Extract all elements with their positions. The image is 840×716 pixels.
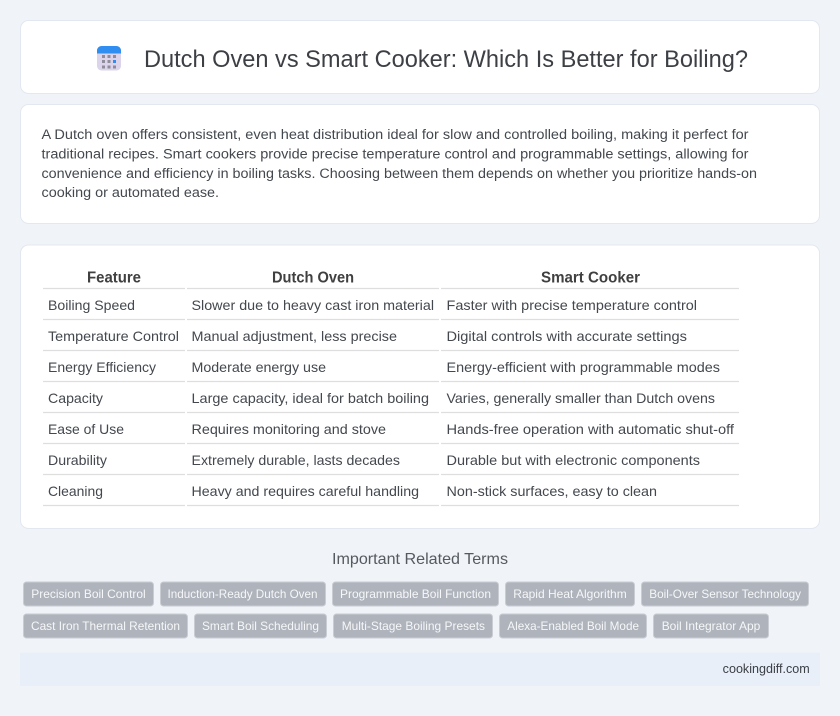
footer xyxy=(20,652,820,686)
tag: Boil Integrator App xyxy=(662,619,761,633)
table row: energy efficiency: Energy-efficient with programmable modes xyxy=(446,359,720,375)
tag xyxy=(506,582,634,606)
text block: introduction paragraph: convenience and efficiency in boiling tasks. Choosing between them depends on whether you prioritize hands-on xyxy=(42,166,757,182)
table row: capacity: Varies, generally smaller than Dutch ovens xyxy=(446,390,715,406)
tags: related terms xyxy=(24,582,808,638)
tag: Precision Boil Control xyxy=(31,587,146,601)
table header row xyxy=(43,270,739,288)
table row: temperature control: Digital controls with accurate settings xyxy=(446,328,687,344)
tag: Rapid Heat Algorithm xyxy=(513,587,627,601)
header panel xyxy=(20,20,820,94)
table row: cleaning: Heavy and requires careful handling xyxy=(192,483,419,499)
tag: Cast Iron Thermal Retention xyxy=(31,619,180,633)
table header row: Feature xyxy=(87,270,141,286)
tag xyxy=(334,614,492,638)
table row: capacity xyxy=(43,390,739,412)
table row: boiling speed xyxy=(43,297,739,320)
table row: durability xyxy=(43,452,739,474)
table row: ease of use: Ease of Use xyxy=(48,421,124,437)
text block: introduction paragraph: traditional recipes. Smart cookers provide precise temperature control and programmable settings, allowing for xyxy=(42,146,749,162)
table row: ease of use: Hands-free operation with automatic shut-off xyxy=(446,421,734,437)
table row: durability: Durability xyxy=(48,452,107,468)
title: Dutch Oven vs Smart Cooker: Which Is Better for Boiling? xyxy=(144,46,748,73)
table row: energy efficiency: Moderate energy use xyxy=(192,359,326,375)
text block: introduction paragraph xyxy=(42,127,757,201)
table row: boiling speed: Boiling Speed xyxy=(48,297,135,313)
tag xyxy=(642,582,808,606)
tag xyxy=(24,614,188,638)
table row: cleaning: Cleaning xyxy=(48,483,103,499)
tag xyxy=(194,614,326,638)
tag: Alexa-Enabled Boil Mode xyxy=(507,619,639,633)
text block: introduction paragraph: cooking or automated ease. xyxy=(42,185,219,201)
tag xyxy=(332,582,498,606)
table row: boiling speed: Slower due to heavy cast iron material xyxy=(192,297,434,313)
table row: temperature control: Manual adjustment, less precise xyxy=(192,328,397,344)
tag xyxy=(160,582,326,606)
panel: comparison table xyxy=(20,245,820,528)
tag xyxy=(654,614,768,638)
table row: capacity: Large capacity, ideal for batch boiling xyxy=(192,390,429,406)
table header row: Dutch Oven xyxy=(272,270,354,286)
heading: important related terms: Important Related Terms xyxy=(332,551,508,568)
text block: introduction paragraph: A Dutch oven offers consistent, even heat distribution ideal for slow and controlled boiling, making it perfect for xyxy=(42,127,749,143)
table header row: Smart Cooker xyxy=(541,270,640,286)
table row: boiling speed: Faster with precise temperature control xyxy=(446,297,697,313)
tag xyxy=(500,614,646,638)
table row: ease of use xyxy=(43,421,739,444)
tag: Induction-Ready Dutch Oven xyxy=(168,587,318,601)
tag: Programmable Boil Function xyxy=(340,587,491,601)
icon: calendar grid xyxy=(97,46,121,70)
table row: energy efficiency xyxy=(43,359,739,382)
table row: temperature control: Temperature Control xyxy=(48,328,179,344)
table row: cleaning xyxy=(43,483,739,506)
tag xyxy=(24,582,154,606)
table row: capacity: Capacity xyxy=(48,390,103,406)
tag: Boil-Over Sensor Technology xyxy=(649,587,801,601)
table row: ease of use: Requires monitoring and stove xyxy=(192,421,386,437)
table row: durability: Extremely durable, lasts decades xyxy=(192,452,400,468)
tag: Smart Boil Scheduling xyxy=(202,619,319,633)
table row: energy efficiency: Energy Efficiency xyxy=(48,359,156,375)
table row: cleaning: Non-stick surfaces, easy to clean xyxy=(446,483,657,499)
tag: Multi-Stage Boiling Presets xyxy=(342,619,485,633)
panel: introduction xyxy=(20,104,820,224)
table row: durability: Durable but with electronic components xyxy=(446,452,700,468)
footer source text: cookingdiff.com xyxy=(723,662,810,676)
table row: temperature control xyxy=(43,328,739,350)
